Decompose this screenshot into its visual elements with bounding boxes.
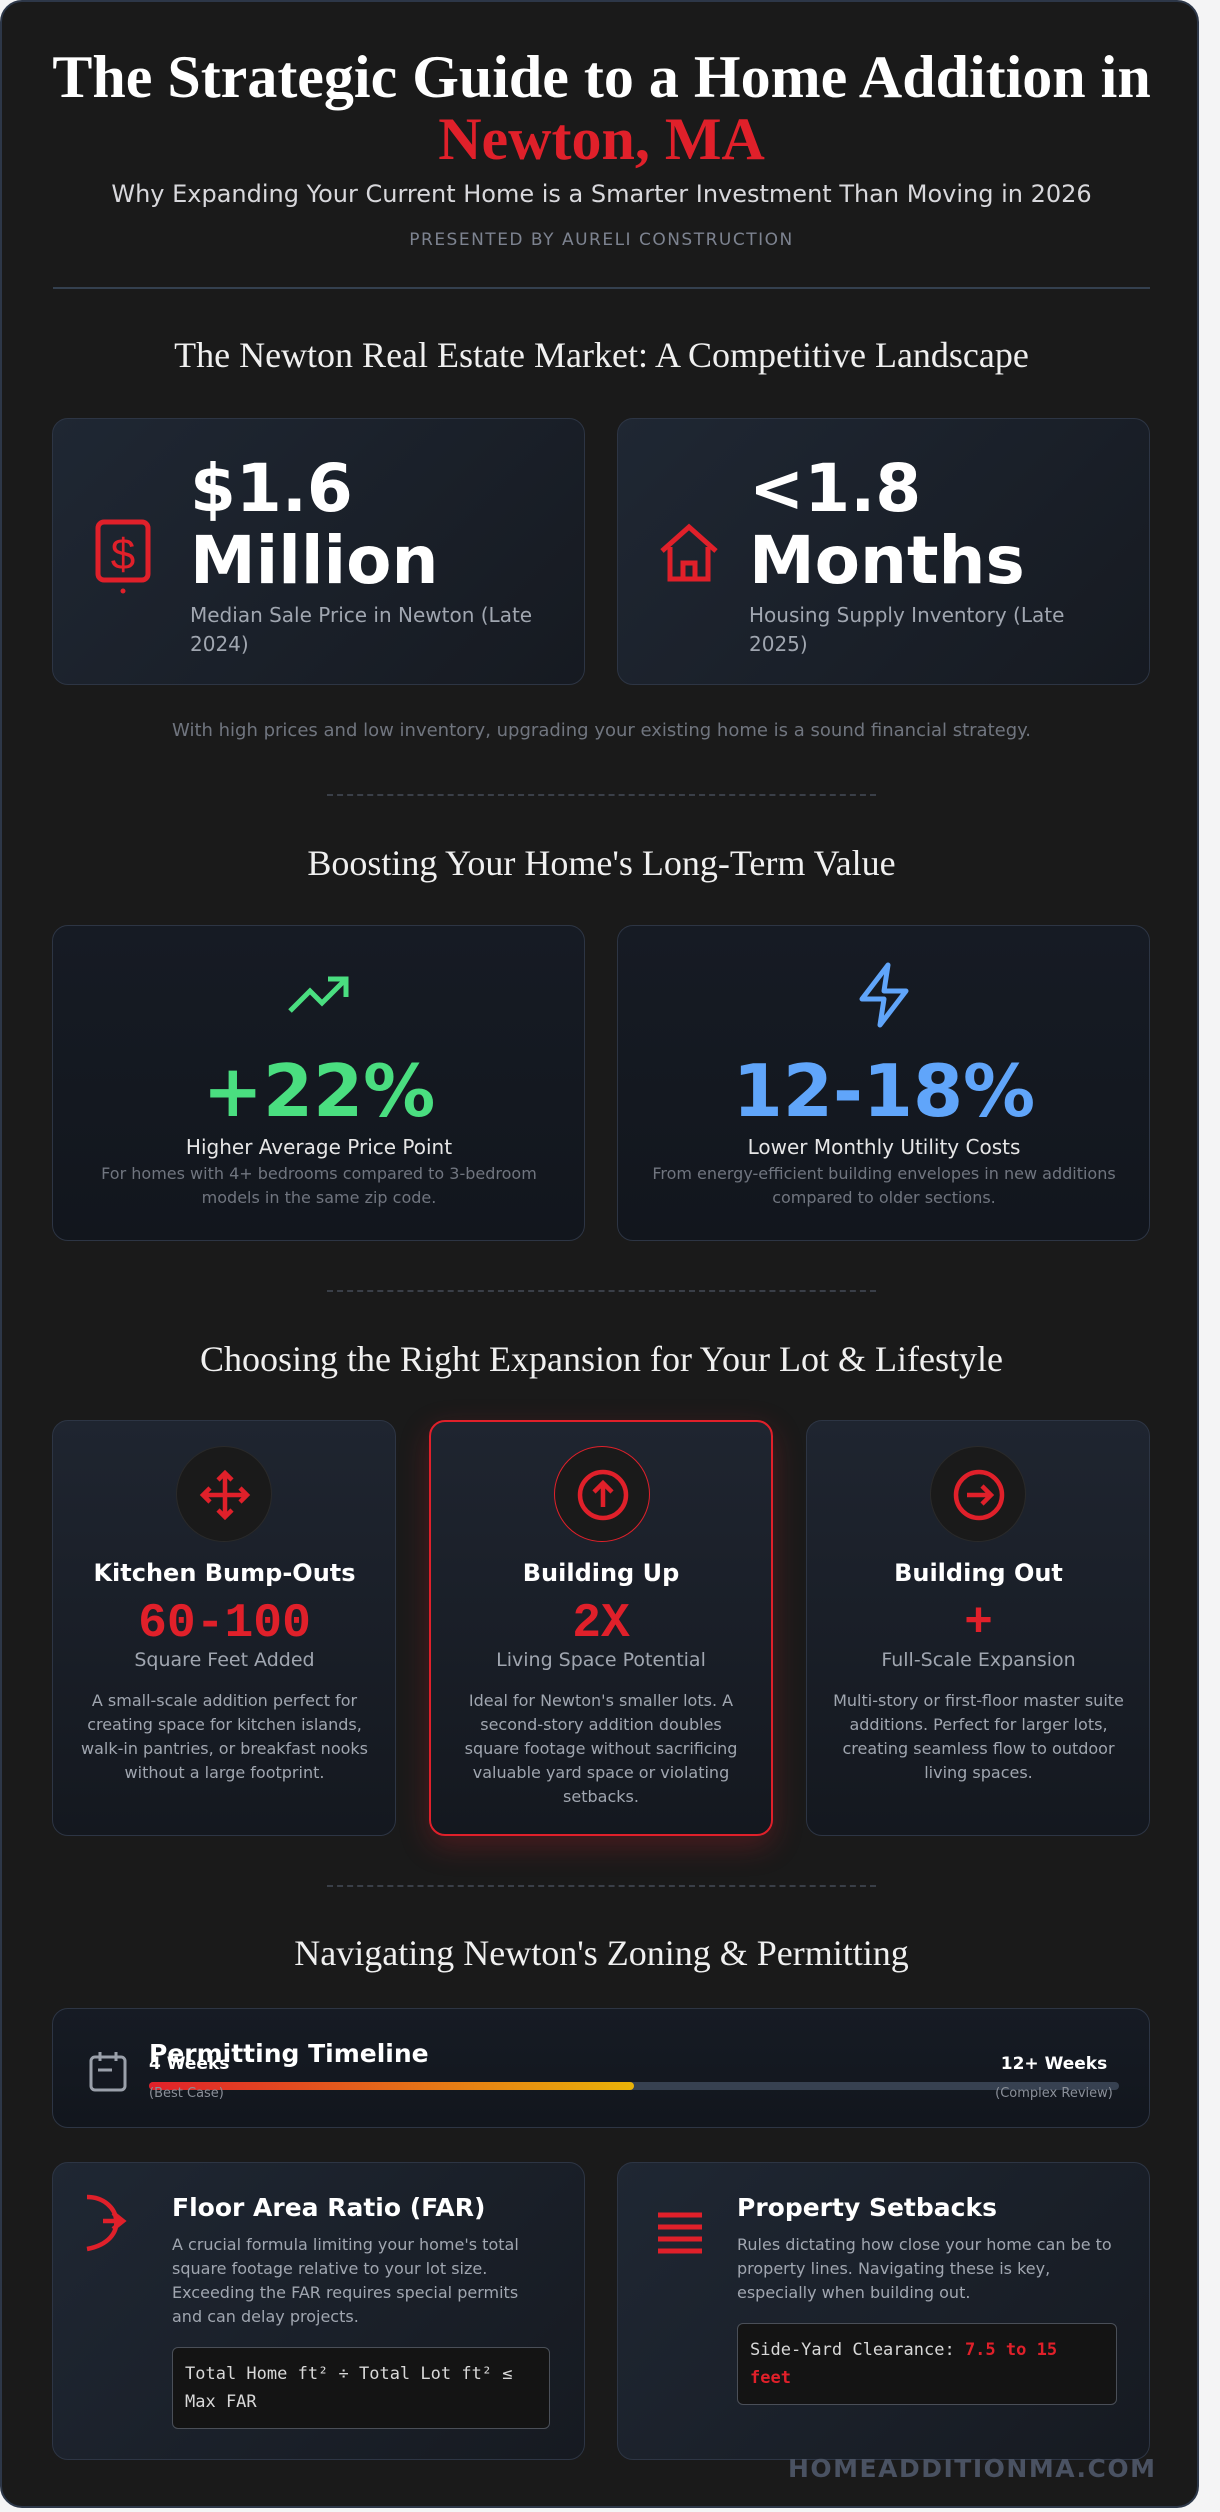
formula box: [172, 2347, 550, 2429]
panel: utility: Lower Monthly Utility Costs: [748, 1135, 1020, 1159]
clearance box: Side-Yard Clearance: 7.5 to 15 feet: [750, 2340, 1057, 2388]
heading: value: Boosting Your Home's Long-Term Value: [307, 843, 896, 883]
panel: building up: Building Up: [523, 1559, 679, 1587]
timeline bar: (Complex Review): [995, 2086, 1113, 2101]
presenter line: PRESENTED BY AURELI CONSTRUCTION: [409, 230, 794, 250]
panel: kitchen bump-outs: [52, 1420, 396, 1836]
heading: zoning: Navigating Newton's Zoning & Permitting: [294, 1933, 909, 1973]
panel: median price: [52, 418, 585, 685]
formula box: Total Home ft² ÷ Total Lot ft² ≤ Max FAR: [185, 2364, 513, 2412]
panel: kitchen bump-outs: 60-100: [138, 1597, 311, 1651]
stat: [749, 450, 1064, 656]
clearance box: [737, 2323, 1117, 2405]
panel: permitting timeline: Permitting Timeline: [149, 2039, 429, 2068]
icon: move arrows: [176, 1446, 272, 1542]
stat: 12-18%: [733, 1049, 1035, 1133]
icon: arrow curve: [86, 2194, 126, 2252]
title: [52, 44, 1151, 172]
stat: $1.6: [190, 450, 353, 527]
icon: dollar: $: [111, 530, 135, 579]
note: With high prices and low inventory, upgrading your existing home is a sound financial strategy.: [172, 720, 1031, 741]
panel: kitchen bump-outs: Square Feet Added: [134, 1649, 315, 1671]
panel: utility: [617, 925, 1150, 1241]
stat: Housing Supply Inventory (Late 2025): [749, 603, 1064, 656]
icon: bolt: [860, 962, 908, 1028]
subtitle: Why Expanding Your Current Home is a Smarter Investment Than Moving in 2026: [111, 180, 1092, 208]
icon: house: [660, 524, 718, 582]
panel: FAR: A crucial formula limiting your home's total square footage relative to your lot size. Exceeding the FAR requires special permits and can delay projects.: [172, 2235, 519, 2326]
panel: building out: Full-Scale Expansion: [881, 1649, 1076, 1671]
panel: utility: From energy-efficient building envelopes in new additions compared to older sections.: [652, 1164, 1116, 1207]
icon: trend up: [288, 976, 348, 1013]
panel: building out: Multi-story or first-floor master suite additions. Perfect for larger lots, creating seamless flow to outdoor living spaces.: [833, 1691, 1124, 1782]
title: Newton, MA: [438, 106, 765, 172]
panel: building up: Living Space Potential: [496, 1649, 706, 1671]
panel: building out: Building Out: [894, 1559, 1063, 1587]
panel: price point: For homes with 4+ bedrooms compared to 3-bedroom models in the same zip code.: [101, 1164, 537, 1207]
footer brand: HOMEADDITIONMA.COM: [788, 2454, 1156, 2483]
stat: Months: [749, 522, 1025, 599]
panel: kitchen bump-outs: A small-scale addition perfect for creating space for kitchen islands, walk-in pantries, or breakfast nooks without a large footprint.: [81, 1691, 368, 1782]
stat: Median Sale Price in Newton (Late 2024): [190, 603, 532, 656]
panel: setbacks: Property Setbacks: [737, 2193, 997, 2222]
icon: dollar: [96, 520, 150, 594]
stat: [190, 450, 532, 656]
icon: arrow right circle: [930, 1446, 1026, 1542]
heading: market: The Newton Real Estate Market: A Competitive Landscape: [174, 335, 1029, 375]
panel: setbacks: Rules dictating how close your home can be to property lines. Navigating these is key, especially when building out.: [737, 2235, 1112, 2302]
timeline bar: [149, 2054, 1119, 2101]
timeline bar: 4 Weeks: [149, 2054, 229, 2074]
panel: inventory: [617, 418, 1150, 685]
panel: kitchen bump-outs: Kitchen Bump-Outs: [93, 1559, 356, 1587]
panel: building out: [806, 1420, 1150, 1836]
timeline bar: (Best Case): [149, 2086, 224, 2101]
panel: FAR: Floor Area Ratio (FAR): [172, 2193, 485, 2222]
panel: building up: 2X: [572, 1597, 630, 1651]
panel: price point: Higher Average Price Point: [186, 1135, 452, 1159]
icon: arrow up circle: [554, 1446, 650, 1542]
title: The Strategic Guide to a Home Addition in: [52, 44, 1151, 110]
stat: <1.8: [749, 450, 921, 527]
stat: Million: [190, 522, 438, 599]
panel: setbacks: [617, 2162, 1150, 2460]
panel: building out: +: [964, 1597, 993, 1651]
panel: FAR: [52, 2162, 585, 2460]
panel: price point: [52, 925, 585, 1241]
panel: building up: Ideal for Newton's smaller lots. A second-story addition doubles square footage without sacrificing valuable yard space or violating setbacks.: [465, 1691, 737, 1806]
icon: calendar: [90, 2052, 126, 2092]
icon: lines: [658, 2212, 702, 2254]
panel: building up: [429, 1420, 773, 1836]
stat: +22%: [203, 1049, 435, 1133]
heading: expansion: Choosing the Right Expansion for Your Lot & Lifestyle: [200, 1339, 1003, 1379]
panel: permitting timeline: [52, 2008, 1150, 2128]
timeline bar: 12+ Weeks: [1001, 2054, 1107, 2074]
